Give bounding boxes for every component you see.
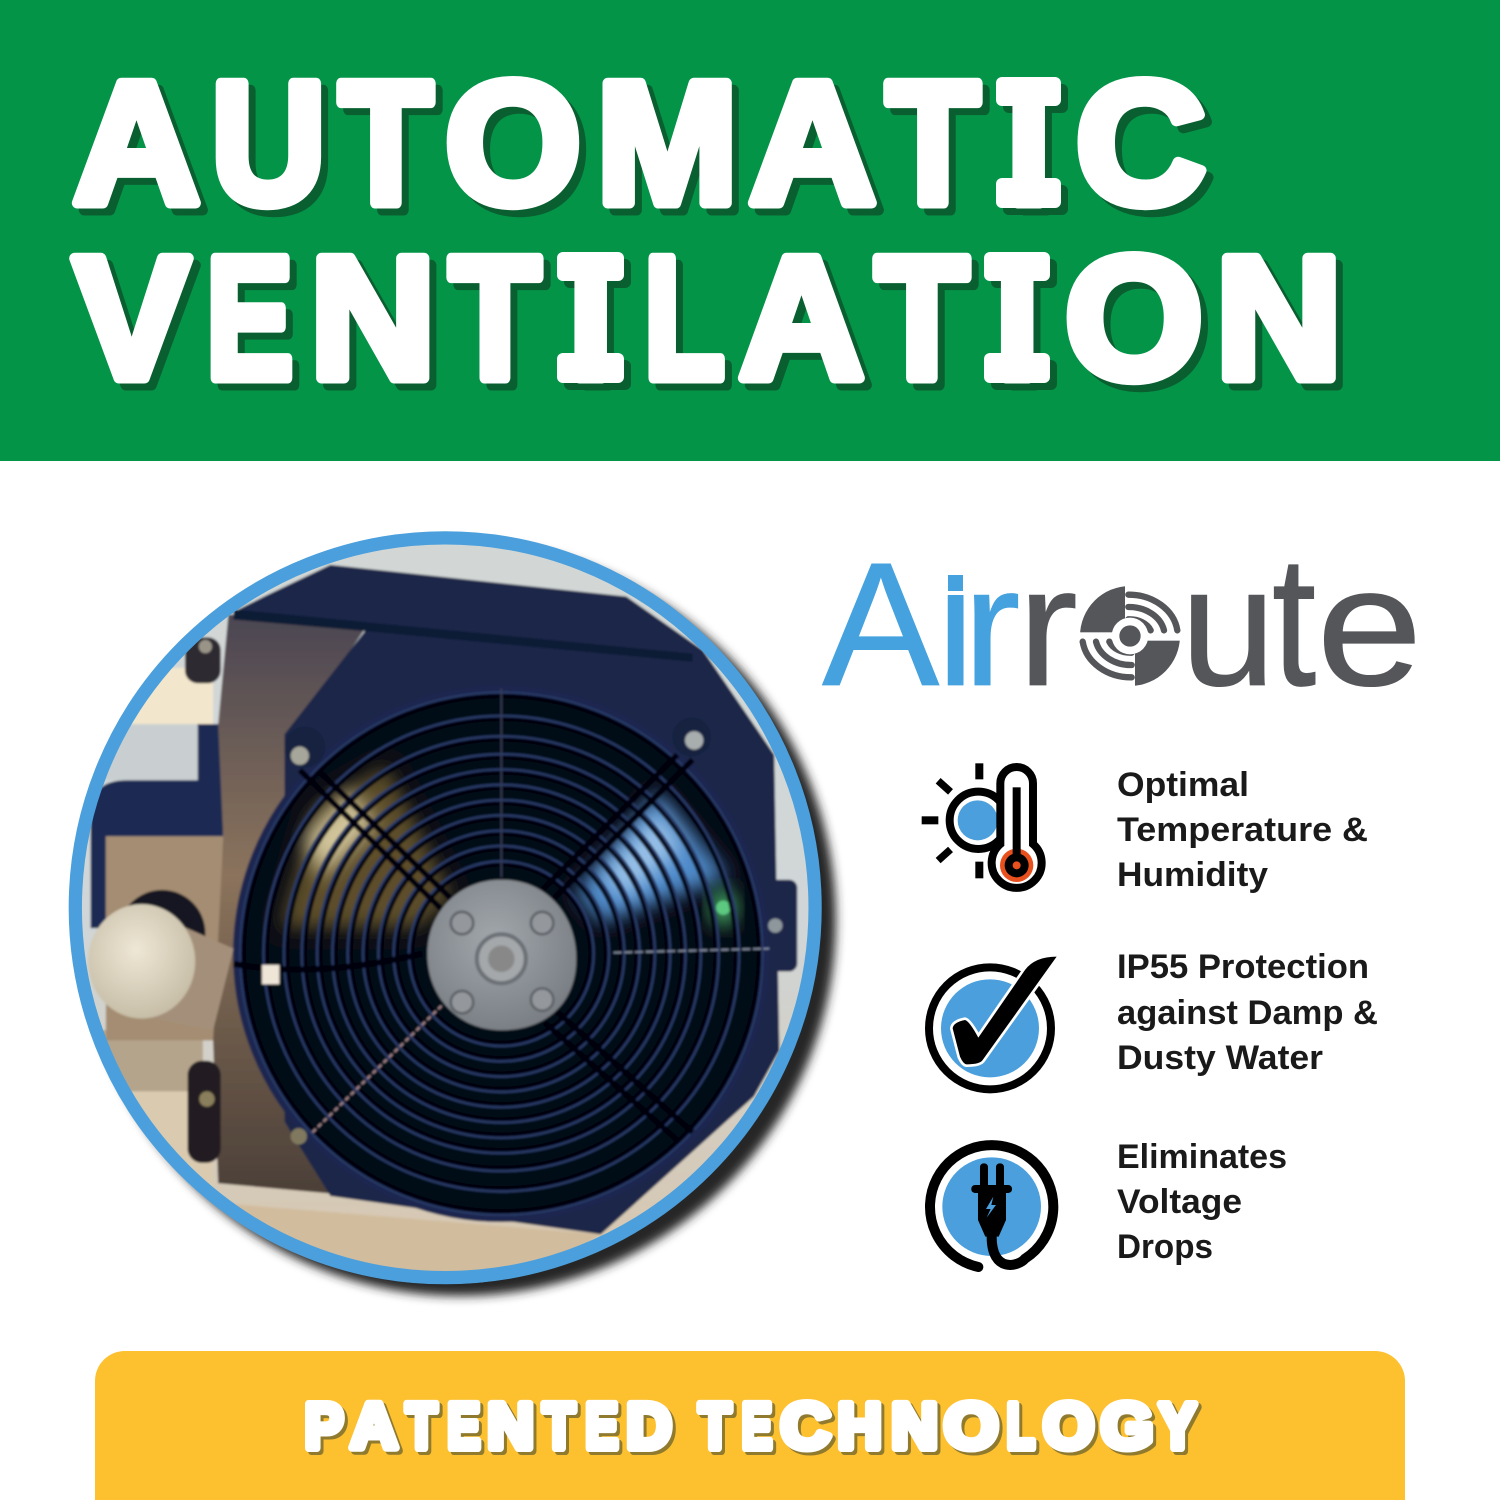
wire rings [244, 696, 759, 1211]
footer label: Patented Technology: D [626, 1390, 672, 1462]
title: Automatic Ventilation: L [644, 220, 725, 415]
text: Optimal Temperature & Humidity: Temperature & [1117, 811, 1368, 849]
navy side bracket [91, 724, 223, 928]
footer label: Patented Technology: P [305, 1390, 343, 1462]
logo disc [1077, 583, 1183, 690]
title: Automatic Ventilation: T [875, 220, 968, 415]
Airroute logo [822, 518, 1423, 725]
text: Eliminates Voltage Drops: Eliminates [1117, 1138, 1287, 1176]
title: Automatic Ventilation: C [1076, 45, 1206, 240]
cable gland cap [128, 888, 207, 937]
wire to hub [233, 954, 422, 970]
text: Eliminates Voltage Drops: Drops [1117, 1228, 1213, 1266]
logo word: ute: e [1316, 532, 1423, 722]
footer label: Patented Technology: T [699, 1390, 731, 1462]
bronze mounting plate [213, 614, 366, 1193]
title: Automatic Ventilation: I [995, 220, 1039, 415]
footer label: Patented Technology: L [1007, 1390, 1035, 1462]
logo word: ute: t [1272, 518, 1316, 725]
title: Automatic Ventilation: O [445, 45, 581, 240]
title: Automatic Ventilation: A [73, 45, 200, 240]
footer label: Patented Technology: E [585, 1390, 618, 1462]
title: Automatic Ventilation: I [1007, 45, 1050, 240]
title: Automatic Ventilation: I [569, 220, 612, 415]
title: Automatic Ventilation: U [211, 45, 326, 240]
footer label: Patented Technology: T [406, 1390, 437, 1462]
grille support arms [300, 755, 693, 1142]
footer label: Patented Technology: E [447, 1390, 480, 1462]
title: Automatic Ventilation: N [1216, 220, 1342, 415]
green title banner [0, 0, 1500, 461]
logo letter: r: r [1017, 532, 1078, 722]
photo drop shadow [84, 544, 836, 1296]
title: Automatic Ventilation: E [206, 220, 293, 415]
footer label: Patented Technology: H [838, 1390, 882, 1462]
logo word: Air: A [822, 527, 940, 723]
icon: thermometer and sun [922, 763, 1042, 888]
text: IP55 Protection against Damp & Dusty Water: IP55 Protection [1117, 948, 1369, 986]
title: Automatic Ventilation: T [339, 45, 432, 240]
text: IP55 Protection against Damp & Dusty Water: against Damp & [1117, 994, 1378, 1032]
light reflections on blades [279, 765, 453, 928]
text: Optimal Temperature & Humidity [1117, 766, 1368, 894]
footer label: Patented Technology: C [781, 1390, 830, 1462]
title: Automatic Ventilation: T [886, 45, 980, 240]
title: Automatic Ventilation [73, 45, 1342, 415]
text: Eliminates Voltage Drops [1117, 1138, 1287, 1266]
text: Optimal Temperature & Humidity: Optimal [1117, 766, 1249, 804]
icon: check mark [929, 957, 1057, 1089]
fan grille disc [233, 686, 769, 1222]
text: IP55 Protection against Damp & Dusty Water: Dusty Water [1117, 1039, 1323, 1077]
logo word: Air: i [937, 532, 975, 722]
footer label: Patented Technology [305, 1390, 1196, 1462]
title: Automatic Ventilation: A [739, 220, 864, 415]
footer label: Patented Technology: N [487, 1390, 534, 1462]
footer label: Patented Technology: O [944, 1390, 998, 1462]
text: IP55 Protection against Damp & Dusty Water [1117, 948, 1378, 1077]
text: Optimal Temperature & Humidity: Humidity [1117, 856, 1268, 894]
mounting screws [284, 727, 325, 767]
footer label: Patented Technology: A [350, 1390, 398, 1462]
logo word: ute: u [1180, 532, 1276, 722]
yellow footer panel [95, 1351, 1405, 1500]
footer label: Patented Technology: N [891, 1390, 938, 1462]
title: Automatic Ventilation: V [74, 220, 190, 415]
motor hub [427, 880, 576, 1030]
title: Automatic Ventilation: A [749, 45, 876, 240]
navy housing [233, 565, 779, 1234]
footer label: Patented Technology: G [1101, 1390, 1153, 1462]
navy tab on right side [774, 878, 799, 973]
blue photo ring [75, 538, 815, 1278]
title: Automatic Ventilation: O [1065, 220, 1203, 415]
circular photo of the fan [60, 520, 860, 1320]
logo word: Air [822, 527, 1021, 723]
title: Automatic Ventilation: T [449, 220, 540, 415]
logo word: Air: r [963, 532, 1021, 722]
title: Automatic Ventilation: M [596, 45, 738, 240]
footer label: Patented Technology: T [543, 1390, 575, 1462]
text: Eliminates Voltage Drops: Voltage [1117, 1183, 1242, 1221]
title: Automatic Ventilation: N [310, 220, 436, 415]
footer label: Patented Technology: E [742, 1390, 772, 1462]
footer label: Patented Technology: Y [1159, 1390, 1196, 1462]
footer label: Patented Technology: O [1043, 1390, 1094, 1462]
icon: electric plug [930, 1145, 1053, 1267]
